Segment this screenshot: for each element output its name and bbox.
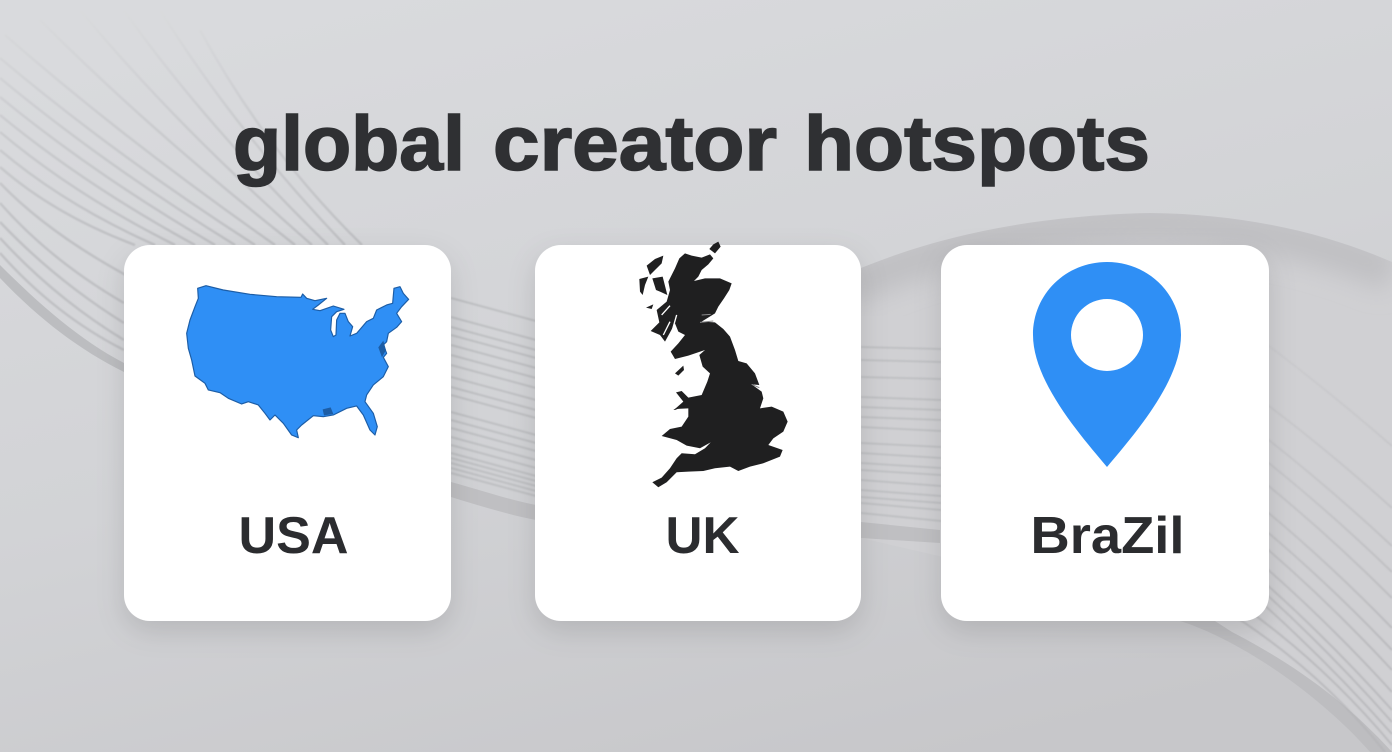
panel: UK: [535, 242, 861, 621]
gap lines center-right: [861, 347, 941, 521]
fan lines: [0, 5, 362, 350]
gap lines center-left: [451, 298, 536, 496]
panel: USA: [124, 245, 451, 621]
title: creator: [493, 101, 777, 187]
title: [233, 101, 1150, 187]
panel: Brazil: [941, 245, 1269, 621]
label: UK: UK: [666, 507, 740, 565]
label: USA: USA: [238, 507, 348, 565]
icon: location pin: [1033, 262, 1181, 467]
icon: UK map: [639, 242, 788, 487]
title: global: [233, 101, 465, 187]
icon: USA map: [187, 286, 409, 438]
left band: [0, 265, 124, 372]
right lines: [1225, 343, 1392, 752]
label: BraZil: BraZil: [1030, 507, 1184, 565]
title: hotspots: [804, 101, 1150, 187]
